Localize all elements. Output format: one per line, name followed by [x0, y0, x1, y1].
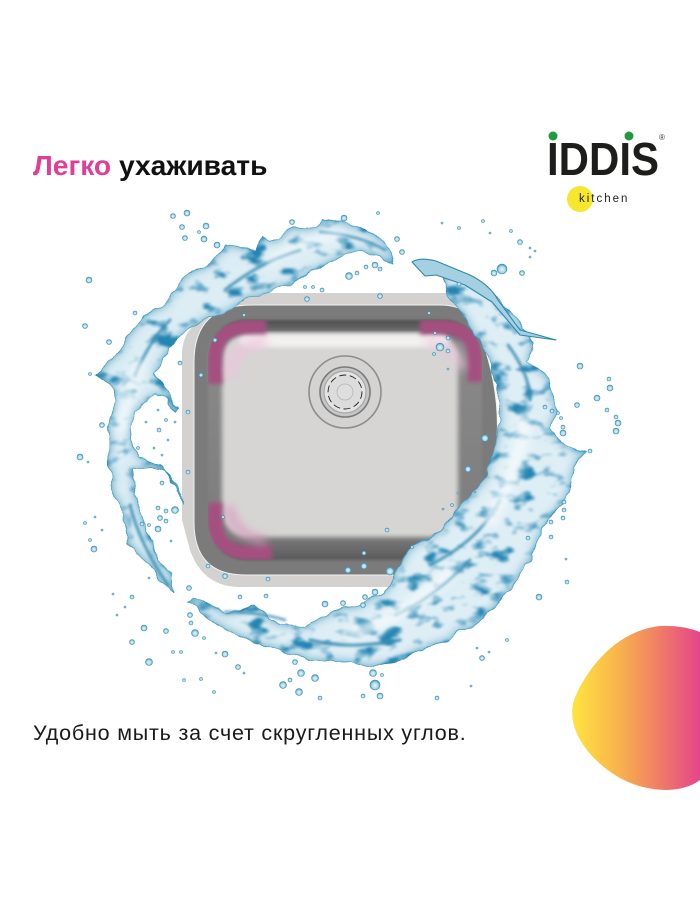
water: thin upper right ribbon	[412, 259, 556, 340]
logo yellow spot	[567, 186, 593, 212]
title: Легко ухаживать	[33, 149, 267, 181]
caption: Удобно мыть за счет скругленных углов.	[33, 721, 466, 745]
registered mark: ®	[659, 133, 665, 142]
logo kitchen word: kitchen	[579, 193, 629, 205]
sink floor	[222, 333, 458, 537]
pink rounded corners	[215, 327, 475, 553]
gradient blob	[572, 626, 700, 790]
pink corner: bottom right	[425, 505, 475, 553]
water: dark blue streaks	[130, 232, 530, 645]
water splash	[77, 210, 621, 700]
water: left arc	[95, 218, 395, 592]
sink	[182, 293, 498, 587]
logo green dots	[548, 132, 634, 140]
sink basin	[194, 305, 497, 575]
logo: IDDIS kitchen	[547, 132, 665, 212]
water: right arc and bottom sweep	[188, 268, 585, 668]
pink corner: top right	[420, 327, 475, 382]
water droplets	[77, 210, 621, 700]
water: white highlights	[122, 236, 525, 635]
sink outer rim	[182, 293, 498, 587]
logo wordmark: IDDIS	[547, 133, 659, 185]
pink corner: top left	[215, 327, 266, 384]
sink floor highlight	[240, 334, 448, 347]
sink inner wall	[208, 320, 482, 560]
sink drain	[309, 356, 381, 428]
pink corner: bottom left	[215, 503, 272, 553]
